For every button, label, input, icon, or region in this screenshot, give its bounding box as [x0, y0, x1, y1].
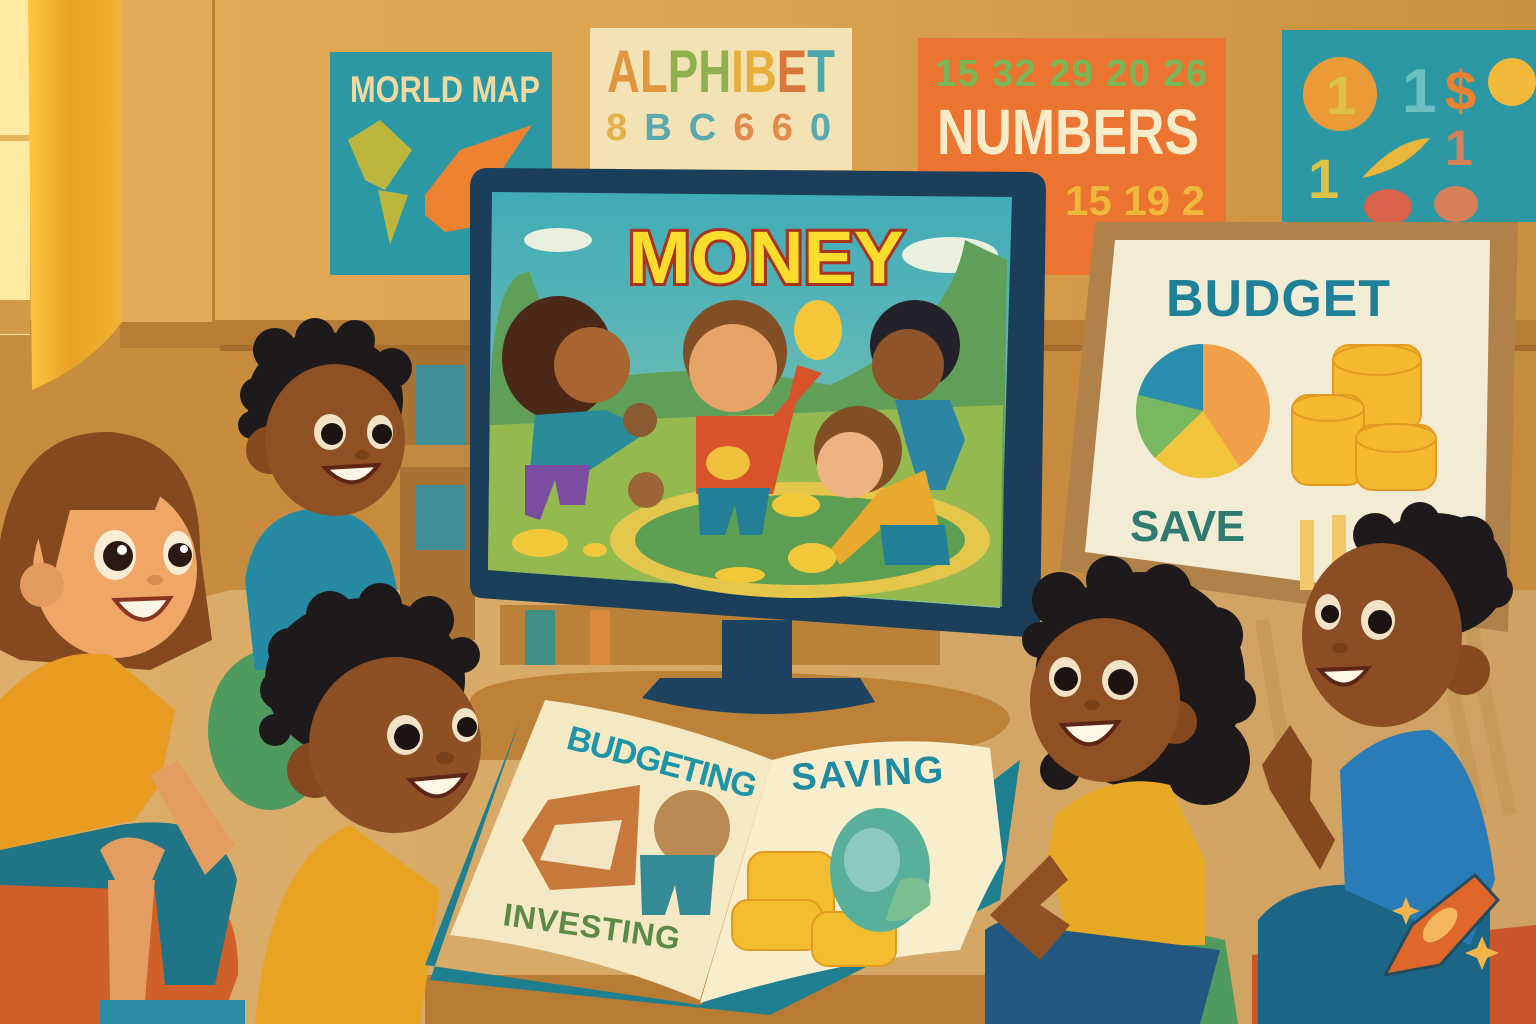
poster: numbers	[918, 38, 1226, 275]
screen coins	[512, 493, 836, 583]
poster: numbers: NUMBERS	[937, 96, 1199, 168]
poster: shapes and numbers: 1	[1445, 120, 1473, 176]
poster: shapes and numbers: 1	[1326, 66, 1356, 126]
book: coin stacks	[732, 852, 896, 966]
book: budgeting heading: BUDGETING	[563, 719, 761, 806]
book: wallet picture	[522, 785, 730, 915]
poster: numbers: 15 19 2	[1065, 177, 1205, 224]
table	[470, 671, 1010, 760]
side wall edge	[122, 0, 212, 322]
child: left girl	[0, 432, 245, 1024]
poster: shapes and numbers	[1282, 30, 1536, 225]
child: front boy	[255, 583, 481, 1024]
wainscot	[0, 320, 1536, 610]
poster: shapes and numbers: 1	[1308, 147, 1339, 210]
poster: world map: MORLD MAP	[350, 69, 540, 110]
book: saving heading: SAVING	[790, 749, 944, 799]
poster: numbers: 15 32 29 20 26	[935, 53, 1207, 95]
screen	[488, 192, 1012, 608]
child: back boy	[208, 318, 412, 810]
open book	[425, 700, 1020, 1015]
poster: shapes and numbers: 1	[1402, 57, 1436, 126]
book: piggy shape	[830, 808, 931, 932]
window	[0, 0, 30, 335]
screen child: boy center	[683, 300, 842, 535]
monitor	[470, 168, 1046, 714]
screen child: girl	[502, 296, 664, 520]
poster: alphabet: ALPHIBET	[607, 38, 835, 105]
poster: alphabet: 8 BC 66 0	[606, 107, 831, 149]
screen child: boy right	[870, 300, 965, 490]
screen child: kneeling	[814, 406, 950, 565]
easel	[1060, 222, 1518, 815]
child: right boy	[1252, 502, 1536, 1024]
coin stacks	[1292, 345, 1436, 490]
trees and hills	[488, 240, 1007, 607]
floor	[0, 590, 1536, 1024]
bookshelf	[400, 350, 940, 665]
clouds	[524, 228, 998, 273]
curtain	[28, 0, 122, 390]
poster: shapes and numbers: $	[1445, 59, 1476, 122]
save label: SAVE	[1130, 502, 1245, 551]
poster: alphabet	[590, 28, 852, 170]
icon: crayon logo	[1385, 875, 1499, 975]
easel heading: BUDGET	[1166, 270, 1390, 328]
poster: world map	[330, 52, 552, 275]
screen title: MONEY	[628, 216, 904, 299]
pie chart	[1136, 344, 1270, 478]
child: right girl	[985, 556, 1256, 1024]
book: investing label: INVESTING	[501, 896, 682, 957]
